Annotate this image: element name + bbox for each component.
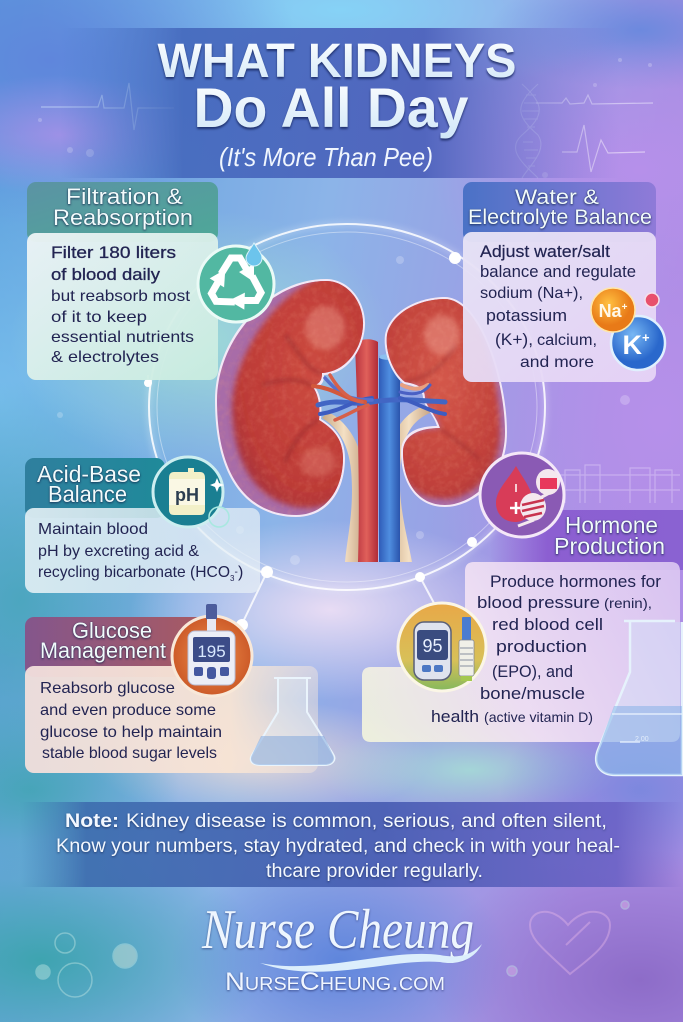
filtration header [27,182,218,242]
glucose header [25,617,205,677]
filtration body text: but reabsorb most [51,288,191,305]
note text: Note: [65,811,119,832]
hormone heading: Hormone [565,512,658,538]
icon: sodium and potassium ions [591,288,665,370]
aorta [355,339,378,562]
water body text: calcium, [537,332,597,349]
water body text: (K+), [495,330,533,349]
icon: recycling arrows [198,243,274,322]
flask: right: 2.00 [635,736,649,743]
acid body text: 3 [230,574,235,583]
ureter left [322,412,366,562]
title band [60,28,620,178]
renal vessels [313,375,445,420]
ecg line: left [41,83,174,130]
glucose heading: Management [40,638,166,663]
icon: blood drop and dna [480,453,564,537]
hormone body text: (renin), [604,595,652,611]
filtration body text: & electrolytes [51,349,159,366]
background lab chart [560,465,680,503]
hormone body text: health [431,708,479,726]
background heart [530,912,610,974]
acid body text: - [234,567,238,578]
flask: left [251,678,334,765]
panel: acid-base balance [25,458,260,593]
water body text: Adjust water/salt [480,243,610,261]
water heading: Electrolyte Balance [468,206,652,229]
hormone body text: (active vitamin D) [484,709,593,725]
panel: hormone production [362,510,683,742]
water header [463,182,656,242]
ureter right [386,405,432,562]
filtration body text: essential nutrients [51,329,194,346]
hormone heading: Production [554,533,665,559]
orbit ring [144,224,545,631]
filtration heading: Reabsorption [53,205,193,230]
filtration body text: of it to keep [51,309,147,326]
water body card [463,232,656,382]
hormone body text: red blood cell [492,616,603,634]
acid heading: Acid-Base [37,461,141,487]
water body text: potassium [486,307,567,325]
glucose body text: stable blood sugar levels [42,745,217,762]
hormone body text: (EPO), and [492,663,573,681]
water body text: sodium (Na+), [480,285,583,302]
filtration heading: Filtration & [66,184,183,209]
vena cava [379,356,400,562]
note text: thcare provider regularly. [266,861,483,882]
title: line one: WHAT KIDNEYS [158,35,516,88]
acid header [25,458,165,518]
subtitle: (It's More Than Pee) [219,142,433,172]
filtration body text: Filter 180 liters [51,243,176,262]
icon: pH bottle: pH [175,485,199,505]
icon: glucose meter [172,604,252,696]
kidneys illustration [215,275,507,562]
hormone body card [362,562,680,742]
icon: sodium and potassium ions: + [642,330,650,345]
icon: pH bottle [153,457,229,527]
hormone body text: bone/muscle [480,685,585,703]
icon: sodium and potassium ions: K [622,330,642,360]
glucose heading: Glucose [72,618,152,643]
ecg line: right lower [562,125,645,172]
filtration body text: of blood daily [51,265,161,284]
water body text: balance and regulate [480,263,636,281]
water body text: and more [520,354,594,371]
background bubbles [36,901,629,997]
kidney right [382,293,507,507]
glucose body text: glucose to help maintain [40,724,222,741]
website url: NurseCheung.com [225,968,445,996]
hormone body text: blood pressure [477,594,600,612]
icon: glucose meter with test strip [398,603,486,691]
acid body text: pH by excreting acid & [38,543,199,560]
panel: water and electrolyte balance [463,182,656,382]
icon: glucose meter with test strip: 95 [422,636,443,656]
water heading: Water & [515,186,599,209]
glucose body text: Reabsorb glucose [40,680,175,697]
glucose body card [25,666,318,773]
glucose body text: and even produce some [40,702,216,719]
filtration body card [27,233,218,380]
title: line two: Do All Day [194,76,468,139]
acid body text: Maintain blood [38,521,148,538]
panel: glucose management [25,617,318,773]
icon: sodium and potassium ions: + [622,302,628,313]
hormone header [490,510,683,570]
flask: right [596,621,682,775]
kidney left [215,275,368,518]
hormone body text: production [496,638,587,656]
note text: Know your numbers, stay hydrated, and check in with your heal- [56,836,620,857]
icon: glucose meter: 195 [197,642,226,661]
dna strand background [515,84,541,178]
acid heading: Balance [48,481,127,507]
note text: Kidney disease is common, serious, and often silent, [126,811,607,832]
panel: filtration and reabsorption [27,182,218,380]
note text [56,811,620,882]
icon: sodium and potassium ions: Na [599,301,622,321]
ecg line: right upper [536,95,653,104]
acid body text: ) [238,564,243,581]
hormone body text: Produce hormones for [490,573,662,591]
acid body card [25,508,260,593]
logo: script name with swoosh: Nurse Cheung [201,899,474,961]
acid body text: recycling bicarbonate (HCO [38,564,230,581]
note band [20,802,683,887]
